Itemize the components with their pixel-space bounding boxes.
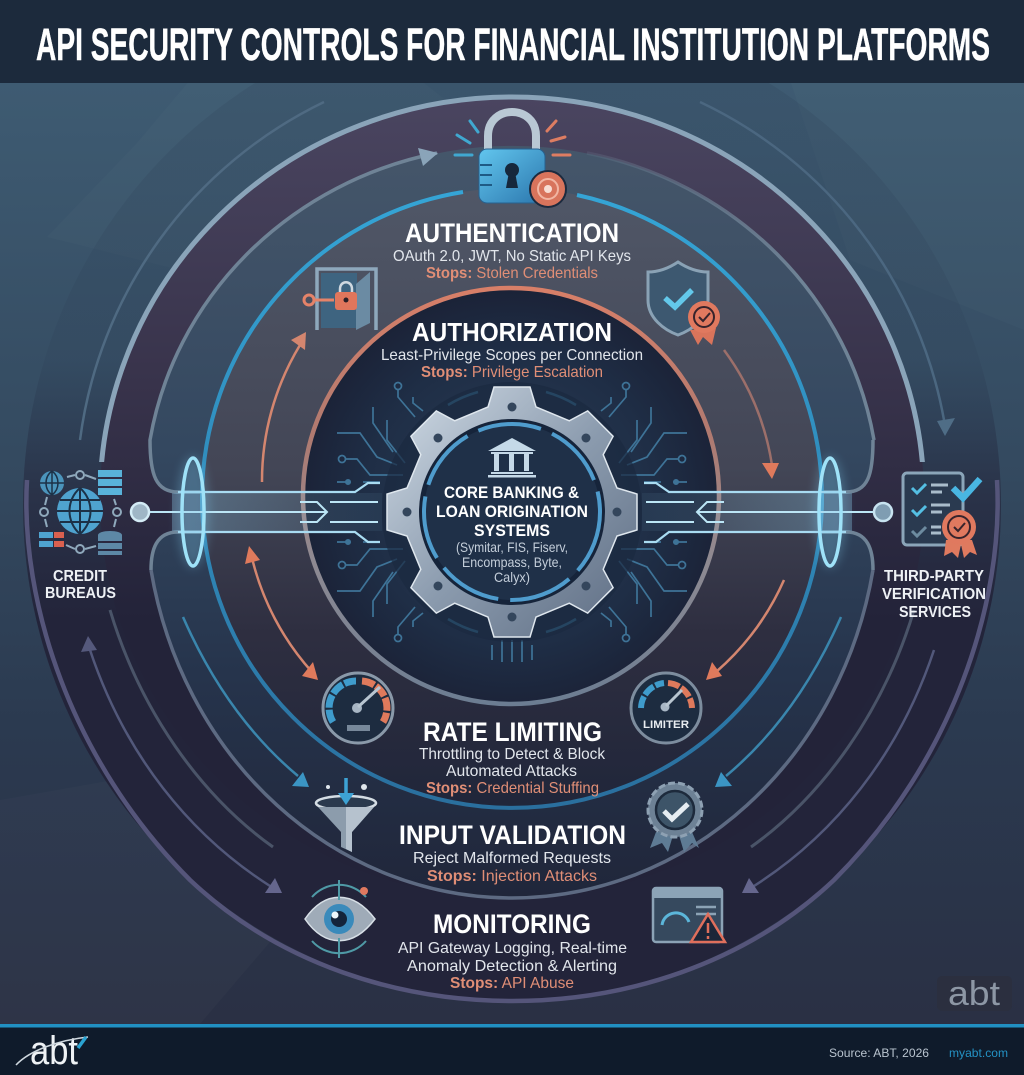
core disc <box>303 288 719 704</box>
central gear <box>382 382 642 642</box>
arrow: purple lower left <box>81 636 282 893</box>
text: rate limiting: Stops: Credential Stuffing <box>426 780 599 797</box>
icon: limiter gauge <box>631 673 701 743</box>
text: monitoring: API Gateway Logging, Real-time <box>398 940 627 957</box>
core label: LOAN ORIGINATION <box>436 502 588 521</box>
core label: (Symitar, FIS, Fiserv, <box>456 539 568 555</box>
icon: limiter gauge: LIMITER <box>643 719 689 731</box>
label: third-party services: SERVICES <box>899 604 971 621</box>
text: monitoring <box>398 909 627 992</box>
node <box>874 503 892 521</box>
icon: dashboard alert <box>653 888 725 942</box>
text: authorization <box>381 317 643 381</box>
portal ring <box>814 456 846 568</box>
portal ring <box>177 456 209 568</box>
arrow: purple lower right <box>742 650 934 893</box>
arrow: top left grey <box>418 148 438 166</box>
text: monitoring: MONITORING <box>433 909 591 939</box>
label: credit bureaus: BUREAUS <box>45 585 116 602</box>
bolts <box>402 402 622 622</box>
text: input validation <box>399 820 626 885</box>
arrow: blue lower left <box>183 617 309 787</box>
blue ring <box>202 188 822 808</box>
data tube <box>172 493 382 531</box>
faint outer guide <box>80 102 324 440</box>
core label: Calyx) <box>494 569 530 585</box>
slate band <box>150 146 874 898</box>
text: rate limiting: RATE LIMITING <box>423 717 602 747</box>
text: authorization: Stops: Privilege Escalation <box>421 364 603 381</box>
circuit traces <box>337 382 687 662</box>
plum band <box>100 97 924 899</box>
label: third-party services <box>882 568 986 621</box>
label: credit bureaus: CREDIT <box>53 568 107 585</box>
text: input validation: Reject Malformed Requests <box>413 850 611 867</box>
icon: monitoring eye <box>305 880 375 958</box>
icon: padlock <box>455 112 570 207</box>
header band <box>0 0 1024 83</box>
icon: credit bureaus network <box>39 470 122 555</box>
icon: door with lock <box>304 269 376 330</box>
gear body <box>382 382 642 642</box>
site link: myabt.com <box>949 1046 1008 1060</box>
flow arrows <box>81 102 955 893</box>
footer logo: abt <box>30 1029 78 1073</box>
arrow: coral lower right <box>706 580 784 680</box>
footer <box>0 1024 1024 1075</box>
inner blue ring <box>424 424 600 600</box>
text: authentication: OAuth 2.0, JWT, No Static API Keys <box>393 248 631 265</box>
left connector <box>131 456 382 568</box>
text: authorization: AUTHORIZATION <box>412 317 612 347</box>
core label: Encompass, Byte, <box>462 554 562 570</box>
text: authentication <box>393 218 631 282</box>
arrow: coral upper left <box>262 332 306 482</box>
right connector <box>642 456 892 568</box>
source: Source: ABT, 2026 <box>829 1046 929 1060</box>
arrow: coral upper right <box>724 350 779 479</box>
core label: CORE BANKING & <box>444 483 579 502</box>
icon: verification checklist <box>903 473 980 558</box>
icon: verified badge <box>648 783 702 852</box>
arrow: blue lower right <box>715 617 841 787</box>
text: authorization: Least-Privilege Scopes per Connection <box>381 347 643 364</box>
arrow: right outer <box>700 102 955 436</box>
arrow: coral lower left <box>245 546 318 680</box>
icon: bank <box>488 438 536 478</box>
icon: speedometer <box>323 673 393 743</box>
text: rate limiting <box>419 717 606 797</box>
text: monitoring: Stops: API Abuse <box>450 975 574 992</box>
label: third-party services: VERIFICATION <box>882 586 986 603</box>
grey ring line <box>150 153 873 570</box>
text: input validation: INPUT VALIDATION <box>399 820 626 850</box>
core label: SYSTEMS <box>474 521 550 540</box>
core label <box>436 483 588 585</box>
text: rate limiting: Throttling to Detect & Block <box>419 746 606 763</box>
node <box>131 503 149 521</box>
label: credit bureaus <box>45 568 116 602</box>
text: monitoring: Anomaly Detection & Alerting <box>407 958 617 975</box>
watermark logo <box>937 975 1012 1013</box>
watermark logo: abt <box>948 975 1001 1013</box>
label: third-party services: THIRD-PARTY <box>884 568 984 585</box>
icon: shield with ribbon <box>648 262 720 345</box>
data tube <box>642 493 852 531</box>
text: authentication: AUTHENTICATION <box>405 218 619 248</box>
text: rate limiting: Automated Attacks <box>446 763 577 780</box>
icon: funnel <box>316 778 376 852</box>
text: input validation: Stops: Injection Attacks <box>427 868 597 885</box>
text: authentication: Stops: Stolen Credentials <box>426 265 598 282</box>
